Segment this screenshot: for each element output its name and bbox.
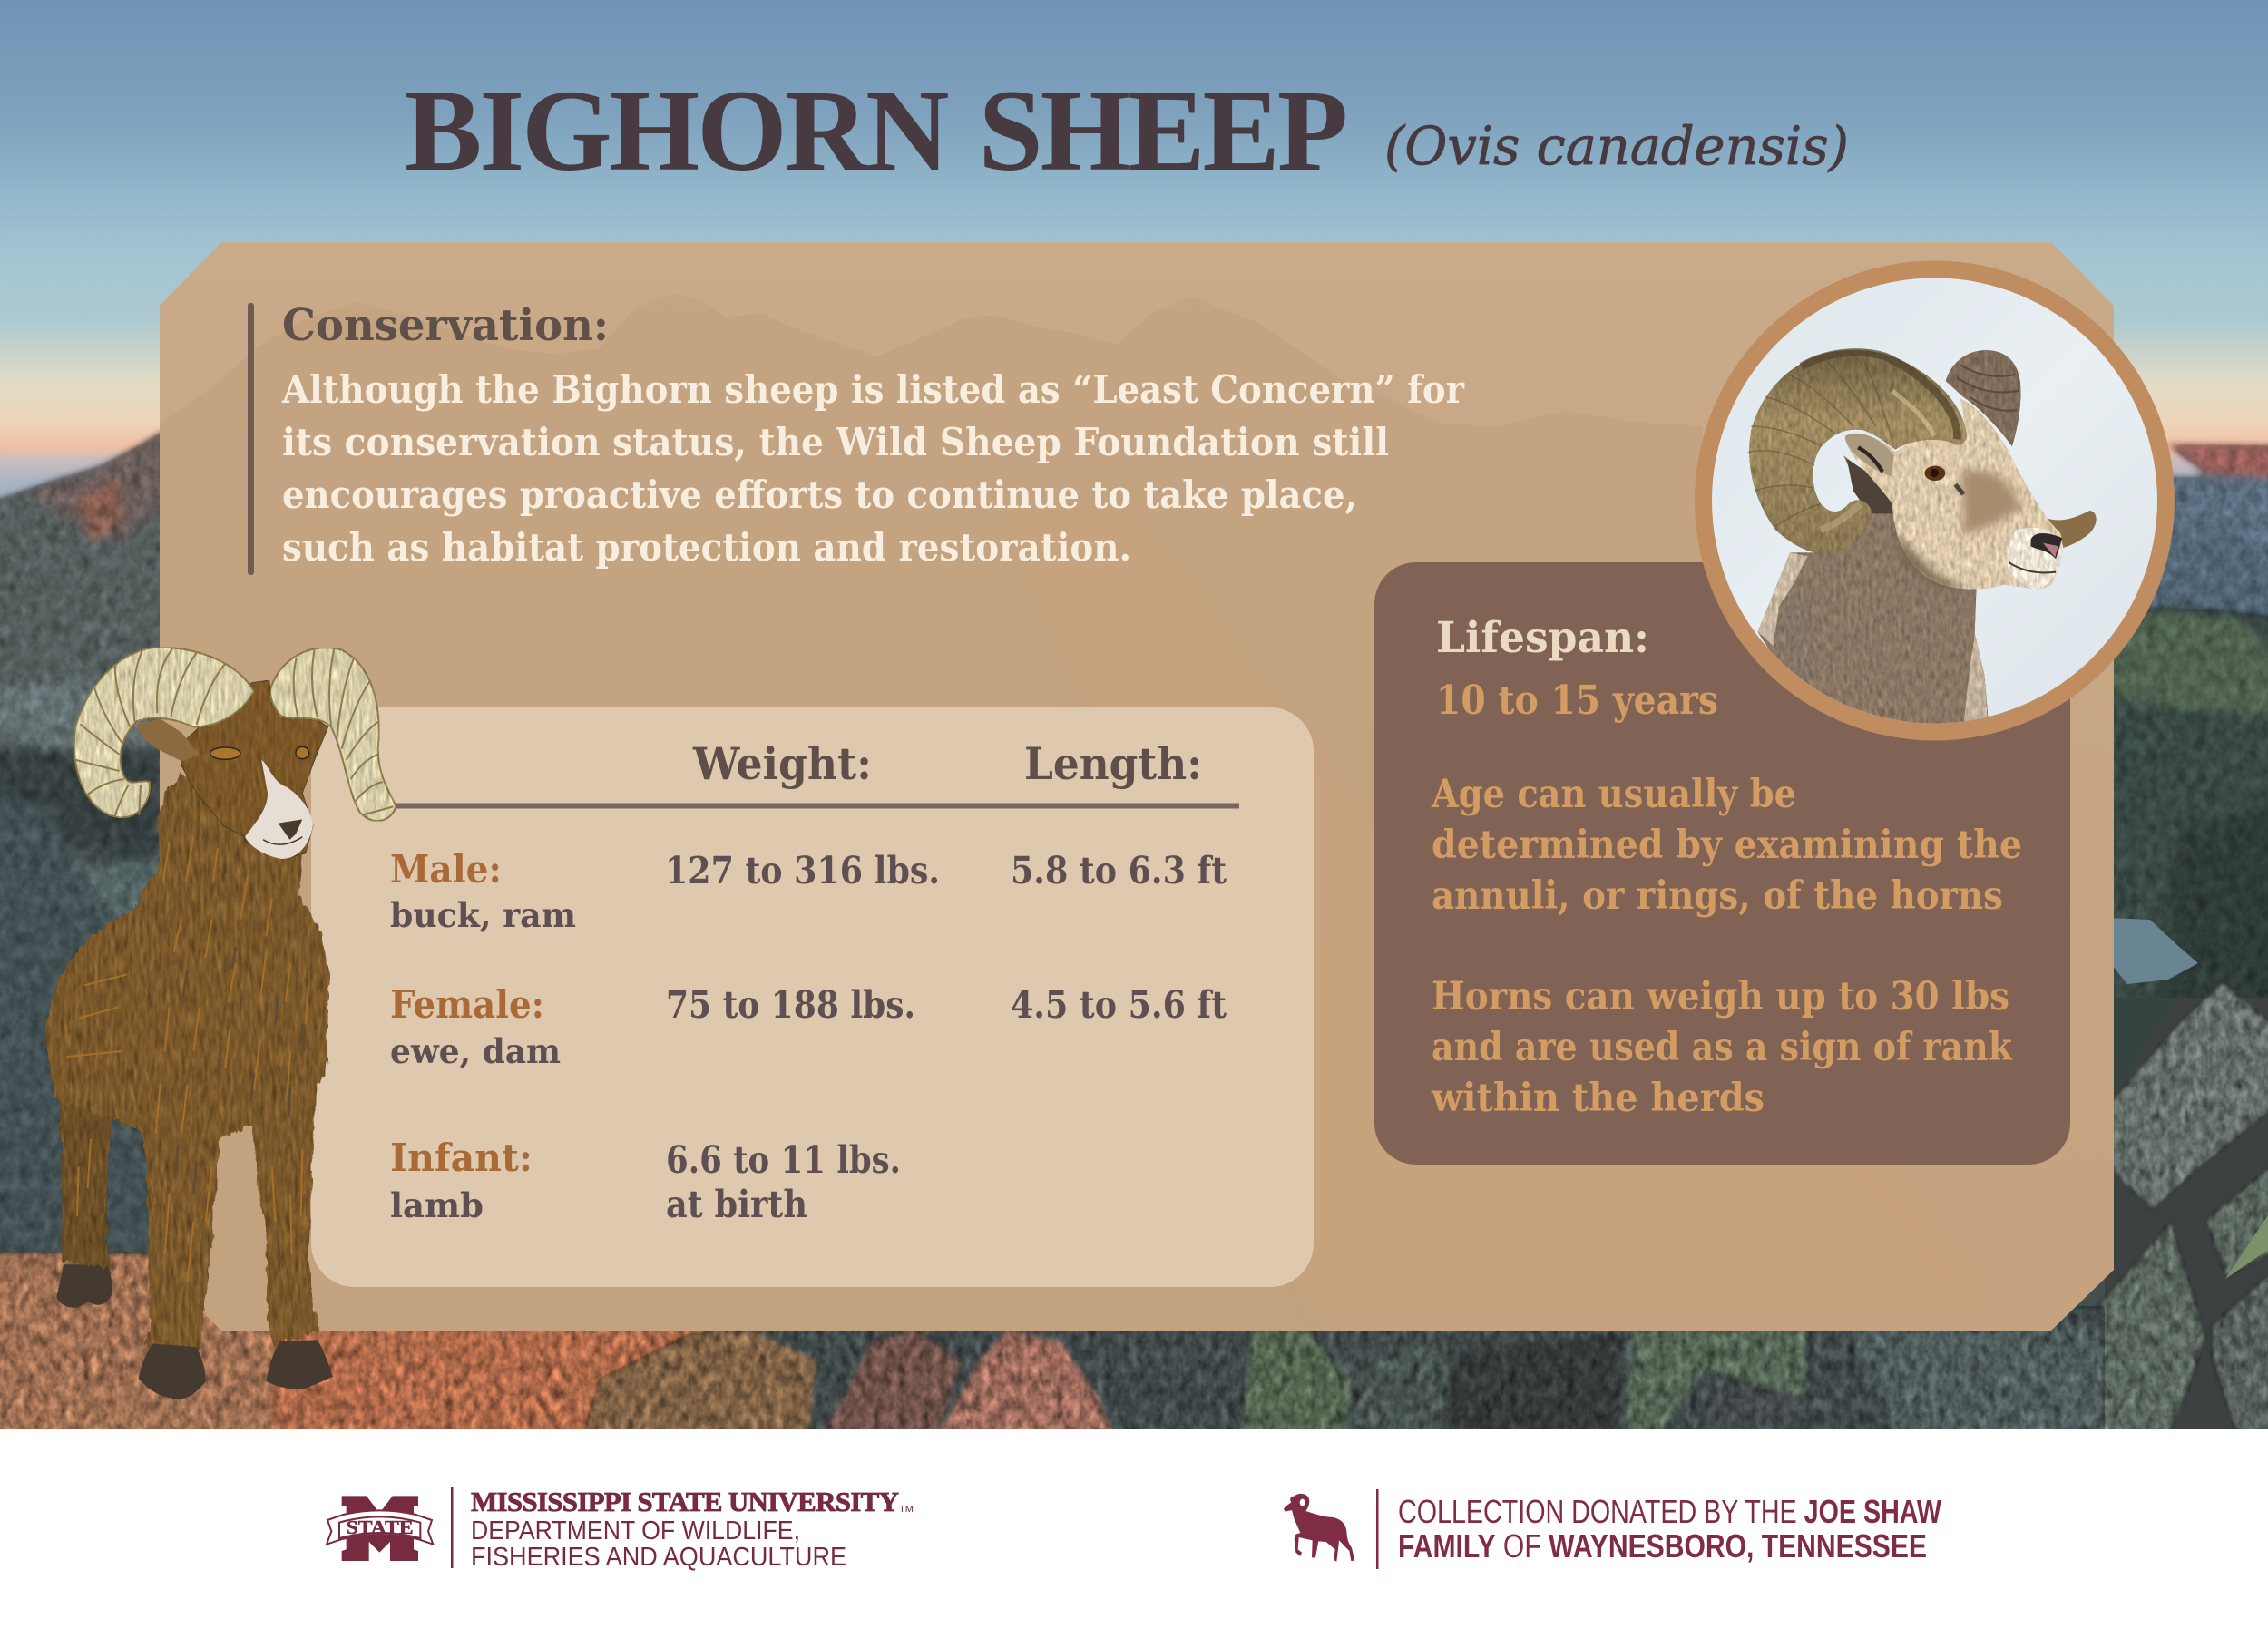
panel: lifespan <box>1374 562 2070 1165</box>
title: BIGHORN SHEEP <box>405 66 1348 195</box>
right green slope <box>2105 606 2268 1007</box>
mountain silhouette inside the card <box>160 293 1702 1331</box>
sheep ear <box>136 718 200 761</box>
panel: weight and length table <box>311 707 1314 1287</box>
lifespan background <box>1374 562 2070 1165</box>
table background <box>311 707 1314 1287</box>
conservation heading: Conservation: <box>282 300 609 351</box>
horn annuli fact <box>1431 772 2022 919</box>
footer: Mississippi State University logo: FISHERIES AND AQUACULTURE <box>471 1543 846 1572</box>
icon: M STATE logo <box>327 1496 433 1561</box>
horn annuli fact: determined by examining the <box>1432 823 2022 868</box>
conservation text: Although the Bighorn sheep is listed as “Least Concern” for <box>281 367 1465 412</box>
sheep mouth <box>263 837 302 844</box>
row: infant: Infant: <box>390 1136 533 1180</box>
ram near horn <box>1748 350 1967 554</box>
row: female: ewe, dam <box>390 1031 561 1071</box>
sheep eyes <box>210 747 240 759</box>
illustrated bighorn sheep <box>44 648 396 1399</box>
ram head <box>1845 399 2063 590</box>
ground strip: grey rocks <box>581 1306 2105 1442</box>
row: infant <box>390 1136 901 1226</box>
row: male: Male: <box>390 847 502 892</box>
horn weight fact: Horns can weigh up to 30 lbs <box>1432 974 2009 1019</box>
panel: main tan card <box>160 242 2114 1331</box>
lifespan heading: Lifespan: <box>1436 613 1649 663</box>
icon: M STATE logo: STATE <box>347 1518 414 1538</box>
sheep right horn <box>270 648 396 821</box>
footer: collection credit: FAMILY OF WAYNESBORO, TENNESSEE <box>1398 1527 1927 1565</box>
horn weight fact: within the herds <box>1431 1076 1765 1121</box>
ram eye <box>1924 466 1945 481</box>
conservation text: its conservation status, the Wild Sheep Foundation still <box>282 420 1389 464</box>
right distant ranges <box>2105 444 2268 644</box>
sheep nose <box>279 819 302 840</box>
row: female <box>390 982 1227 1071</box>
row: infant: at birth <box>666 1183 807 1226</box>
scientific name: (Ovis canadensis) <box>1384 115 1849 177</box>
horn weight fact: and are used as a sign of rank <box>1432 1025 2013 1070</box>
university name: MISSISSIPPI STATE UNIVERSITY <box>471 1486 899 1517</box>
logo divider <box>451 1487 454 1568</box>
warm lower slope <box>998 508 1996 1306</box>
conservation block <box>248 300 1465 575</box>
credit text: COLLECTION DONATED BY THE JOE SHAW <box>1398 1493 1941 1530</box>
far legs <box>57 1073 115 1268</box>
credit divider <box>1376 1489 1379 1569</box>
trademark: TM <box>899 1505 914 1515</box>
dark base of the landscape <box>145 689 2268 1429</box>
sheep head <box>136 680 328 859</box>
row: male <box>390 847 1227 935</box>
row: male: 127 to 316 lbs. <box>665 849 940 892</box>
circular ram portrait <box>1695 261 2175 740</box>
white muzzle <box>245 760 313 859</box>
mountain lake <box>2109 918 2198 984</box>
column heading: length: Length: <box>1024 737 1202 790</box>
footer band <box>0 1429 2268 1638</box>
sheep left horn <box>74 648 254 818</box>
horn annuli fact: annuli, or rings, of the horns <box>1432 873 2003 919</box>
lifespan value: 10 to 15 years <box>1436 678 1718 724</box>
fur marks <box>66 837 308 1282</box>
ram nose <box>2031 533 2062 559</box>
row: female: Female: <box>390 982 544 1027</box>
ram far horn <box>1946 350 2097 549</box>
front hooves <box>139 1344 206 1399</box>
conservation text: such as habitat protection and restoration. <box>282 525 1131 570</box>
column heading: weight: Weight: <box>692 737 872 790</box>
ground strip: orange scrub <box>0 1252 708 1442</box>
conservation text: encourages proactive efforts to continue to take place, <box>282 473 1357 517</box>
table header rule <box>390 804 1239 809</box>
row: male: 5.8 to 6.3 ft <box>1011 849 1227 892</box>
row: male: buck, ram <box>390 895 576 935</box>
icon: ram silhouette <box>1284 1494 1354 1562</box>
horn weight fact <box>1431 974 2013 1121</box>
far hind hoof <box>56 1264 112 1308</box>
rocks on the right <box>2087 980 2268 1442</box>
footer: Mississippi State University logo <box>327 1486 914 1572</box>
portrait ring <box>1695 261 2175 740</box>
row: female: 4.5 to 5.6 ft <box>1011 983 1227 1027</box>
footer: collection credit <box>1284 1489 1941 1569</box>
ram mouth <box>2009 562 2056 572</box>
department name: DEPARTMENT OF WILDLIFE, <box>471 1516 800 1545</box>
horn annuli fact: Age can usually be <box>1431 772 1796 817</box>
accent bar <box>248 303 254 575</box>
ram body <box>1757 455 1989 727</box>
row: infant: 6.6 to 11 lbs. <box>666 1138 901 1182</box>
row: female: 75 to 188 lbs. <box>666 983 915 1027</box>
sheep body <box>44 774 329 1350</box>
ram ear <box>1845 434 1893 476</box>
sky gradient <box>0 0 2268 517</box>
row: infant: lamb <box>390 1185 484 1225</box>
conservation text <box>281 367 1465 570</box>
left mountain range <box>0 426 181 1270</box>
